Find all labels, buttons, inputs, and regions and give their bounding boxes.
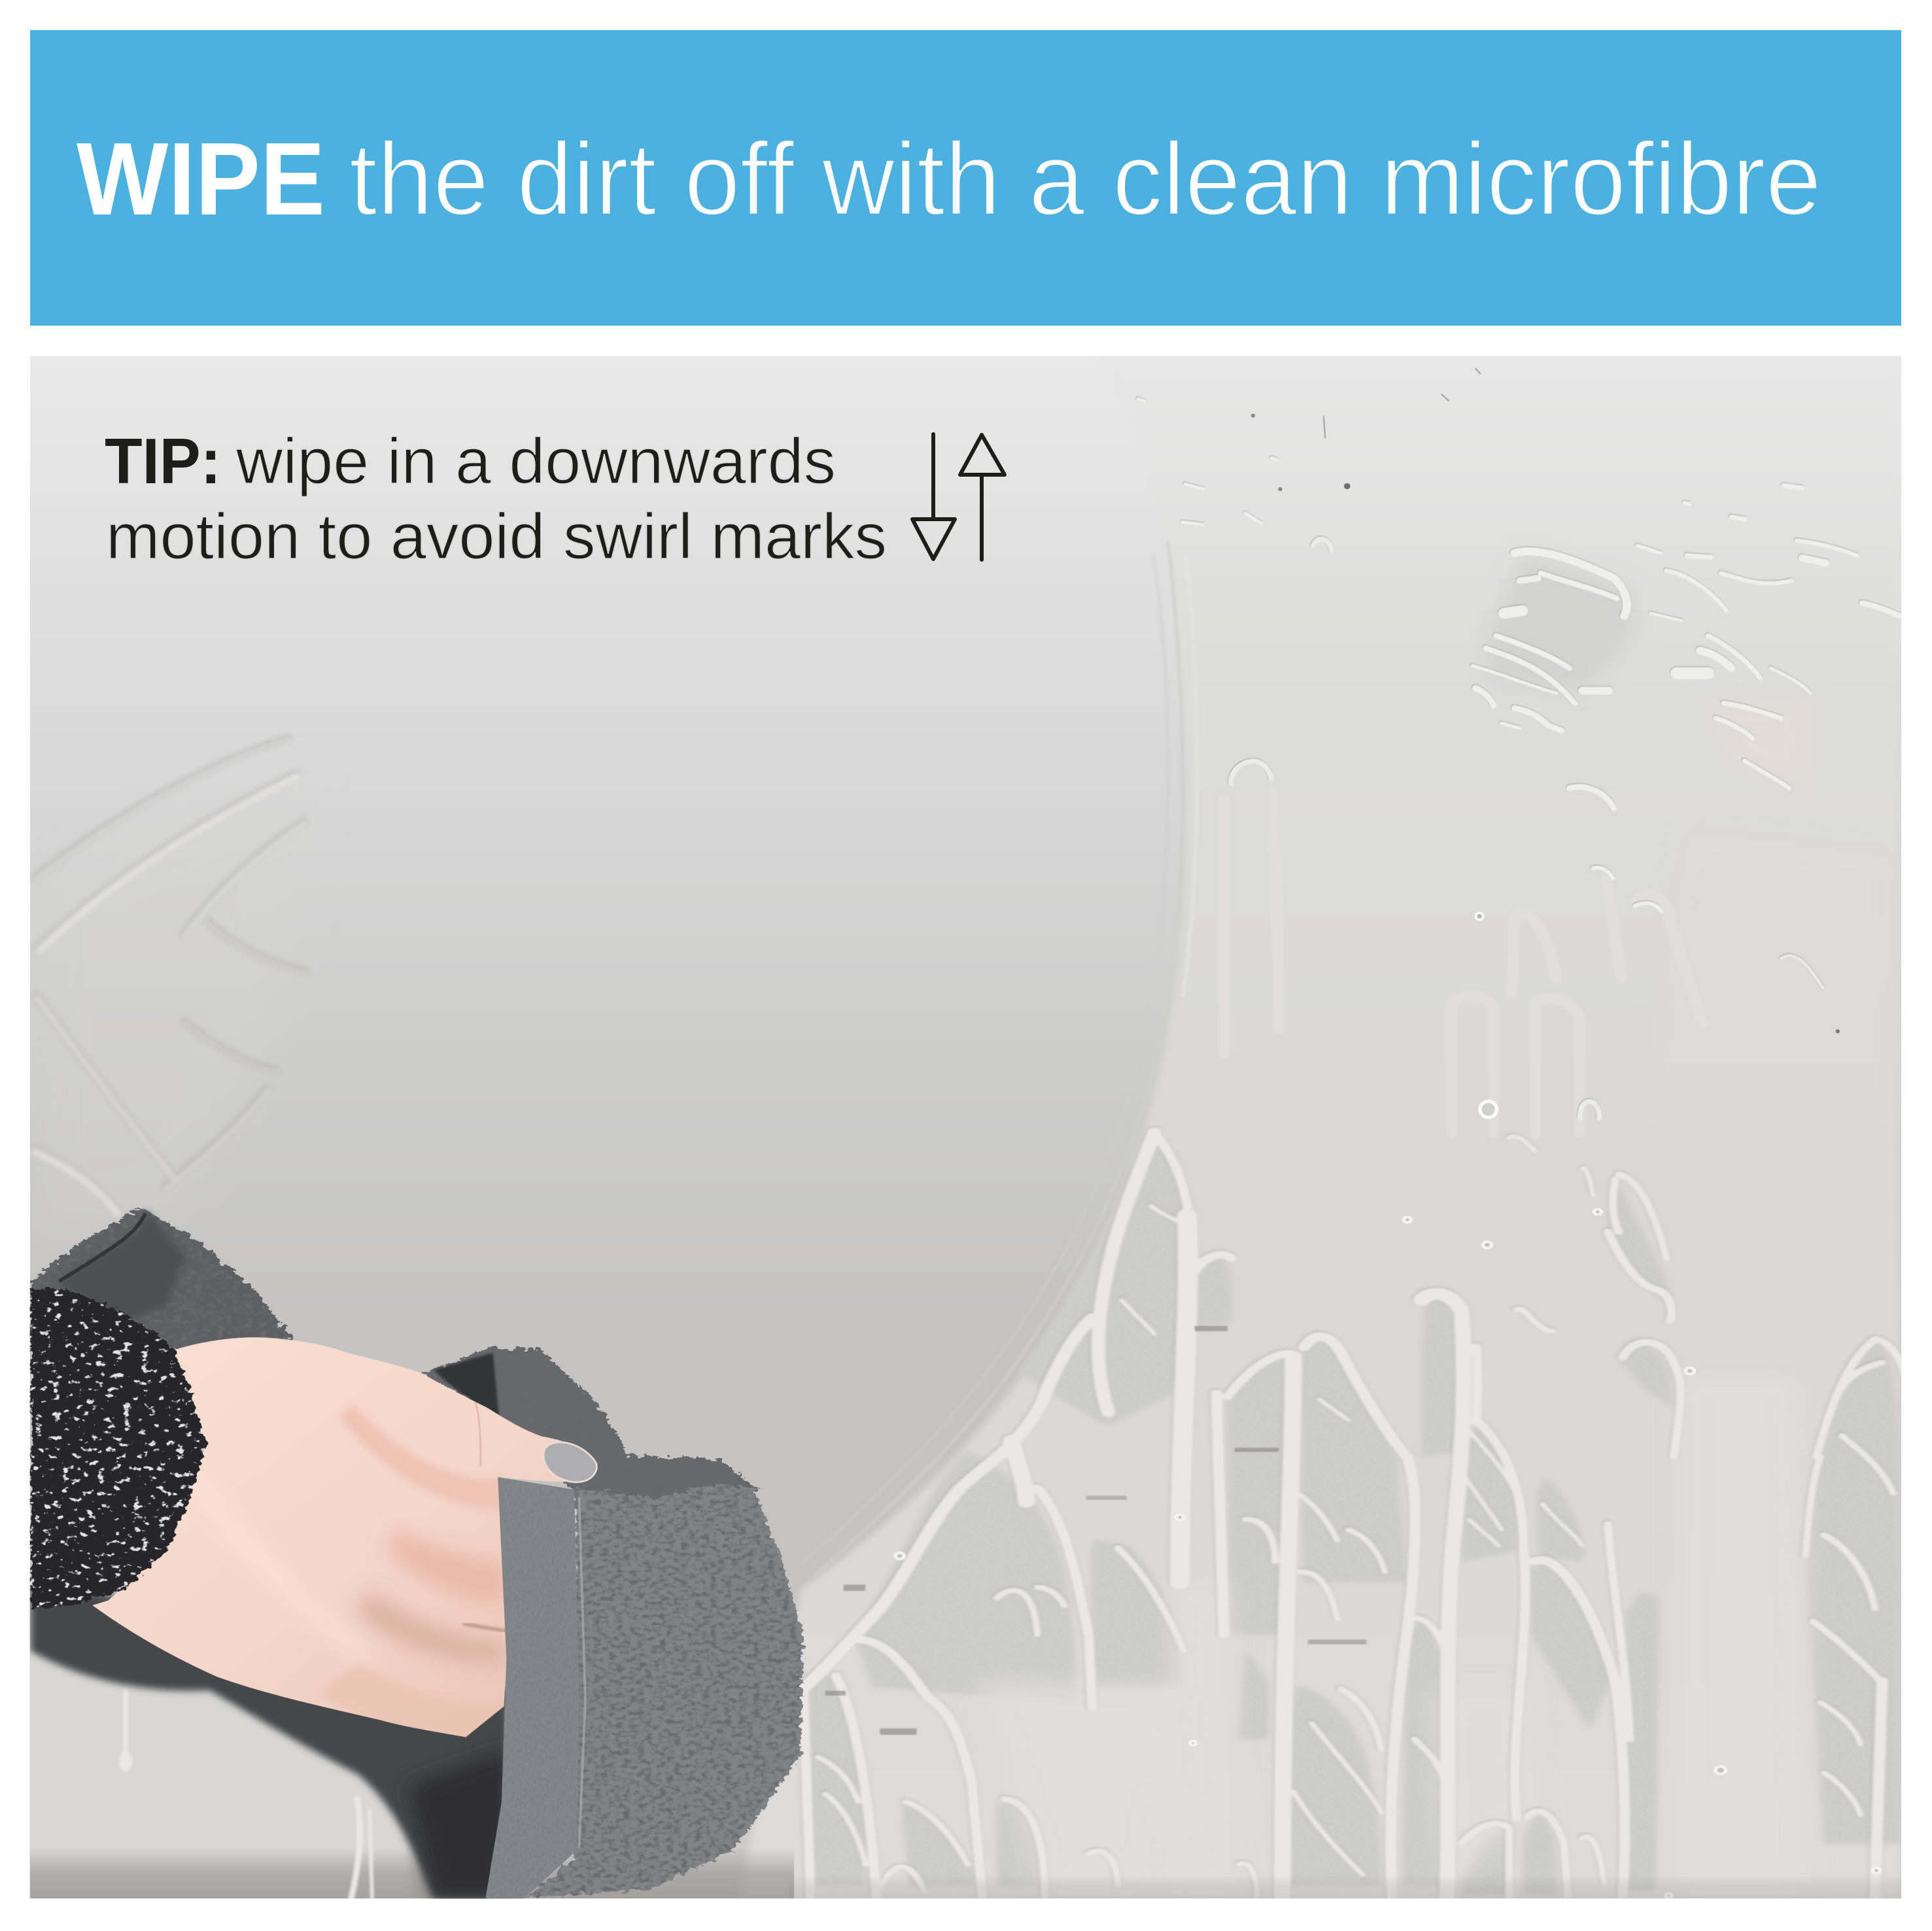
dirty soapy area (748, 542, 1901, 1898)
soap streaks in upper right (1138, 368, 1899, 1133)
towel: dark lower fold under the wrist (31, 1583, 508, 1898)
icon: up and down arrows (912, 434, 1005, 560)
hand holding the towel (92, 1337, 598, 1743)
faint drip columns (1224, 793, 1702, 1133)
tip text (105, 425, 887, 572)
arrow: upwards (960, 435, 1005, 560)
bubbles and specks (1251, 368, 1840, 1118)
tip text: motion to avoid swirl marks (106, 500, 887, 572)
dark grit marks (825, 1326, 1366, 1735)
towel: upper fold over the thumb (423, 1348, 759, 1505)
towel: woven hem (485, 1477, 585, 1898)
tip text: TIP: (105, 425, 221, 497)
bottom ledge below the door panel (29, 1651, 794, 1898)
banner heading: WIPE (77, 122, 325, 237)
ledge shadow (30, 1848, 794, 1898)
concrete-like exposed dirt patches with drip runs (799, 1111, 1904, 1898)
pale wash over the lower middle (975, 1373, 1809, 1896)
drips on the ledge (120, 1690, 372, 1898)
right bottom shade (789, 1875, 1901, 1898)
tip text: wipe in a downwards (235, 425, 836, 497)
white drip runs (799, 1133, 1904, 1896)
banner heading: the dirt off with a clean microfibre (349, 122, 1821, 237)
towel: terry body (524, 1484, 803, 1898)
fingernail (543, 1443, 596, 1482)
soap bubbles (895, 1111, 1880, 1898)
hand shading (185, 1398, 506, 1743)
top banner (30, 30, 1901, 326)
smear haze on the left (31, 776, 308, 1244)
arrow: downwards (912, 434, 955, 559)
clean wiped area swirl marks (35, 739, 308, 1214)
drip arches (1231, 539, 1823, 1118)
panel: photo of car door being wiped (29, 356, 1904, 1898)
dark dirt patches (807, 1138, 1901, 1896)
dome edge arcs (872, 543, 1182, 1522)
sweater cuff (31, 1288, 206, 1609)
towel: back fold by the wrist (31, 1207, 293, 1355)
